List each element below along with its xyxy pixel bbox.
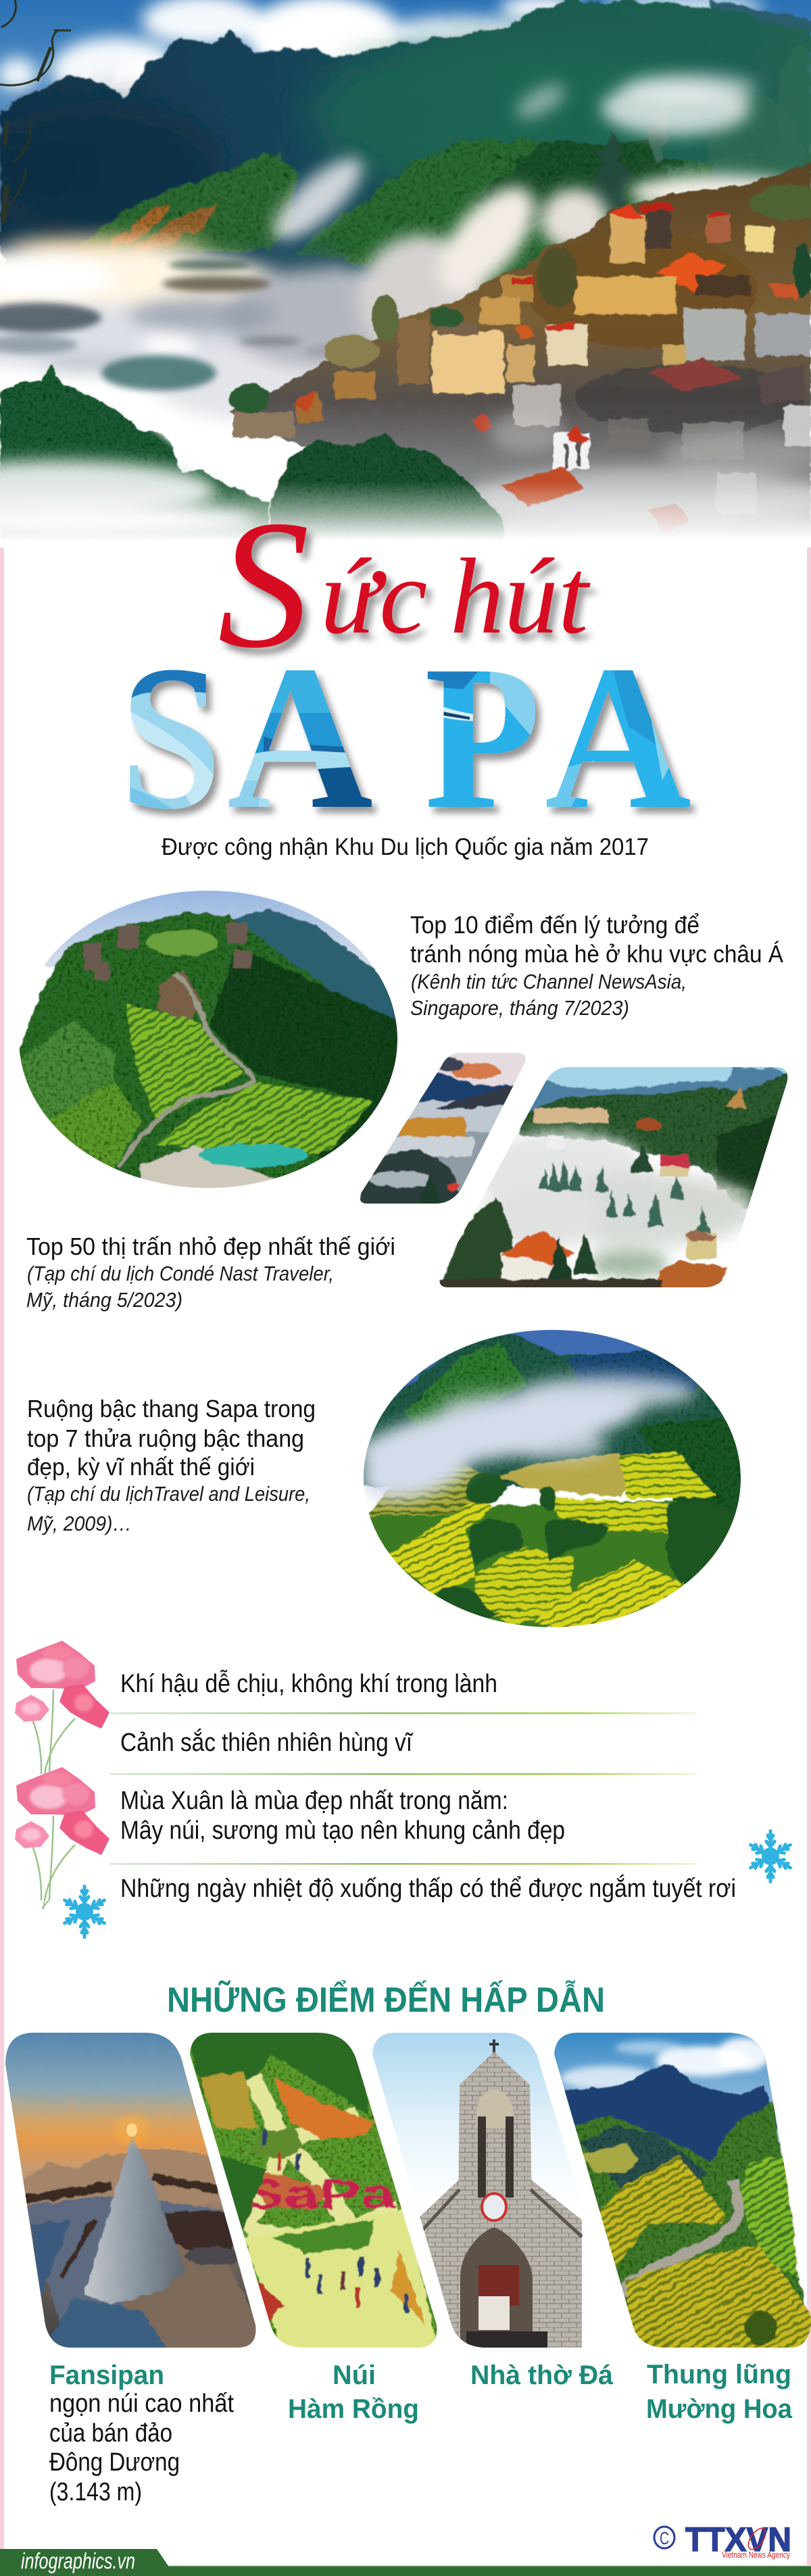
wooden deck [24, 2196, 230, 2325]
headline line 1: Top 10 điểm đến lý tưởng để [410, 911, 699, 939]
hanging branches [0, 0, 71, 223]
crowd at door [466, 2331, 547, 2352]
railing near [61, 2220, 95, 2277]
description line 4: (3.143 m) [49, 2478, 142, 2506]
title: Sức hút: ức [320, 536, 427, 656]
turquoise pool [199, 1144, 308, 1167]
hilltop grass [147, 929, 218, 956]
yellow villa [686, 1233, 716, 1259]
village strip [534, 1108, 608, 1123]
title: Sức hút [218, 482, 591, 686]
town ground [228, 162, 811, 547]
photo card: Muong Hoa valley [547, 2027, 811, 2352]
clouds [561, 2037, 770, 2090]
mist band [351, 1376, 696, 1514]
word Sa Pa in flowers: SaPa [243, 2171, 396, 2218]
painted hillside [7, 878, 412, 1196]
shaded left flank [0, 101, 230, 237]
sunset sky [0, 2027, 267, 2352]
point 2: Cảnh sắc thiên nhiên hùng vĩ [120, 1728, 413, 1757]
list: climate and scenery points [120, 1669, 736, 1903]
pine near mansion [573, 1233, 598, 1274]
green base of lower field [358, 1500, 689, 1635]
cross on spire [489, 2039, 499, 2054]
distant blue mountain [230, 909, 406, 1061]
line 2: Mường Hoa [646, 2394, 793, 2424]
painted valley [558, 2064, 811, 2352]
yellow path network [243, 2078, 399, 2237]
tall pine [547, 1237, 574, 1284]
lower green bed [272, 2220, 375, 2254]
town on ridge [434, 1085, 514, 1108]
point 3 line 2: Mây núi, sương mù tạo nên khung cảnh đẹp [120, 1816, 565, 1845]
louvre window left [478, 2116, 486, 2198]
blue mountains [527, 1067, 791, 1122]
caption: Muong Hoa valley [646, 2360, 793, 2424]
distant ridge at top right [708, 0, 811, 32]
dusk fog [392, 1101, 507, 1132]
red lights [448, 1183, 460, 1191]
logo: TTXVN copyright mark [654, 2521, 791, 2560]
tree upper right [589, 131, 633, 216]
copyright circle [654, 2527, 674, 2548]
hillside villages [727, 1088, 747, 1108]
main mountain range [0, 0, 811, 284]
caption: Ham Rong mountain [288, 2360, 419, 2424]
sky [433, 1061, 797, 1101]
description line 1: ngọn núi cao nhất [49, 2389, 234, 2418]
left deck blue [30, 2220, 71, 2298]
red door [478, 2265, 519, 2306]
low mist at left bottom [0, 460, 216, 520]
orange clouds [451, 1063, 502, 1079]
pool deck [140, 1145, 297, 1193]
spire arch [476, 2089, 514, 2129]
clouds above the ridge [0, 0, 772, 101]
text: Top 10 cooling destinations [410, 911, 783, 1020]
photo: Sa Pa at dusk, parallelogram [355, 1047, 531, 1210]
red-roofed hotel [660, 1156, 689, 1167]
lower golden terraces [625, 2244, 811, 2352]
agency line: Vietnam News Agency [722, 2550, 790, 2560]
text: Top 50 towns [26, 1233, 395, 1312]
source line 1: (Tạp chí du lịchTravel and Leisure, [27, 1482, 310, 1506]
green bar and tab [0, 2549, 811, 2576]
description line 3: Đông Dương [49, 2448, 180, 2477]
fog over the lower town [466, 412, 811, 525]
second letter A: A [545, 623, 691, 852]
small fir [651, 108, 667, 162]
letter S: S [120, 623, 222, 852]
icon: snowflake, right [749, 1831, 792, 1881]
upper left olive terrace [368, 1463, 493, 1516]
thin highlight above bar [168, 2565, 811, 2567]
dark boulders [185, 2246, 241, 2265]
left flower bed [200, 2071, 258, 2129]
roofs and facades [610, 215, 645, 262]
road [119, 973, 253, 1168]
warm shadow mass [527, 233, 757, 348]
title: SAPA marbled letters [120, 623, 691, 852]
wooded hills [520, 1071, 791, 1210]
blue mountains [406, 1072, 520, 1108]
point 4: Những ngày nhiệt độ xuống thấp có thể được ngắm tuyết rơi [120, 1874, 736, 1903]
stone church and orange roof [501, 426, 757, 534]
autumn tree [635, 1118, 662, 1132]
painted garden [182, 2027, 446, 2352]
rocks [122, 2237, 264, 2352]
orange flower bed [274, 2078, 375, 2139]
source line 2: Mỹ, tháng 5/2023) [26, 1288, 182, 1312]
dark deck shadow [166, 2210, 233, 2250]
lower fog [378, 1137, 473, 1157]
dark hedge [220, 2156, 267, 2230]
foreground pine forests [0, 365, 503, 541]
flower spray 2 [15, 1767, 109, 1900]
church nave [416, 2179, 582, 2352]
lower left terrace [389, 1497, 493, 1595]
cream villa [547, 1135, 564, 1149]
mansion roof [501, 1231, 574, 1265]
forest top [186, 2027, 368, 2115]
headline line 3: đẹp, kỳ vĩ nhất thế giới [27, 1453, 255, 1481]
summit pyramid [84, 2135, 186, 2304]
dark tree at bottom [744, 2310, 777, 2346]
source line 1: (Tạp chí du lịch Condé Nast Traveler, [27, 1262, 334, 1285]
photo: Sa Pa in morning fog, parallelogram [433, 1061, 797, 1291]
fade into the white page [0, 481, 811, 547]
photo card: Ham Rong flower garden [182, 2027, 446, 2352]
hotel walls [660, 1167, 689, 1176]
dark ridges within the clouds [0, 259, 385, 391]
lit green terrace [124, 1004, 243, 1120]
lit hotel [399, 1118, 466, 1138]
photo card: Fansipan summit at sunset [0, 2027, 267, 2352]
town on the hillside [228, 162, 811, 547]
photo card: Stone Church [365, 2027, 629, 2352]
title: Sức hút: S [218, 482, 310, 686]
source line 2: Singapore, tháng 7/2023) [410, 996, 629, 1020]
headline line 2: top 7 thửa ruộng bậc thang [27, 1425, 304, 1452]
hilltop villas [84, 922, 252, 1020]
line 2: Hàm Rồng [288, 2394, 419, 2424]
diagonal cloud in the valley [262, 146, 374, 253]
red flower band [247, 2169, 331, 2210]
line 1: Thung lũng [647, 2360, 791, 2389]
copyright circle: C [660, 2528, 669, 2548]
headline line 2: tránh nóng mùa hè ở khu vực châu Á [410, 940, 783, 968]
letter A: A [227, 623, 373, 852]
headline line 1: Ruộng bậc thang Sapa trong [27, 1395, 316, 1422]
sun glow [114, 2115, 149, 2145]
icon: snowflake, lower left [63, 1887, 106, 1937]
lower right terrace [534, 1561, 686, 1635]
name: Fansipan [49, 2360, 164, 2390]
heading: attractive destinations: NHỮNG ĐIỂM ĐẾN HẤP DẪN [167, 1980, 605, 2020]
extended stems [42, 1900, 49, 1909]
painted foggy town [433, 1061, 797, 1291]
river [622, 2179, 739, 2294]
bright mist bottom [0, 504, 257, 537]
villa roof [686, 1230, 718, 1242]
flower spray 1 [15, 1641, 109, 1774]
painted dusk scene [355, 1047, 531, 1210]
orange roofed mansion [501, 1254, 552, 1284]
red border bottom left [253, 2277, 284, 2325]
forested mountain [358, 1333, 743, 1608]
green light on the right flank [311, 41, 716, 189]
louvre window right [506, 2116, 514, 2198]
headline: Top 50 thị trấn nhỏ đẹp nhất thế giới [26, 1233, 395, 1260]
right flower bed [391, 2250, 426, 2325]
lower walkway [243, 2210, 439, 2352]
painted summit [0, 2027, 267, 2352]
sea of clouds [0, 171, 804, 419]
list: pink flowers decoration [15, 1641, 109, 1909]
green valley slopes [564, 2102, 811, 2352]
dusk sky [355, 1047, 531, 1088]
dark left trees [439, 1196, 514, 1287]
fir cluster right [707, 95, 805, 181]
blue mountains [558, 2064, 777, 2203]
pale fog patch [369, 1171, 431, 1187]
orange bush [659, 1261, 727, 1291]
right green terraces [740, 2156, 799, 2277]
caption: Fansipan [49, 2360, 234, 2506]
dense fog [473, 1132, 757, 1277]
title: Sức hút: hút [450, 536, 591, 656]
dark ground [439, 1279, 662, 1290]
point 1: Khí hậu dễ chịu, không khí trong lành [120, 1669, 497, 1698]
upper right mist [511, 73, 757, 135]
red orbit accent [745, 2525, 769, 2552]
painted terraces [358, 1324, 743, 1635]
terraced hill [595, 2156, 727, 2277]
hero photo: Sa Pa town above the clouds [0, 0, 811, 547]
photo: golden rice terraces under mist, circle [351, 1324, 743, 1635]
sky [0, 0, 811, 243]
pine [418, 1172, 443, 1206]
sky [547, 2027, 811, 2162]
mid right terrace [541, 1497, 683, 1533]
sky gradient [365, 2027, 629, 2352]
dark green tree clumps [433, 1472, 737, 1622]
lower curved terrace [155, 1083, 372, 1159]
gothic door arch [460, 2227, 533, 2352]
far railing [24, 2177, 218, 2200]
base haze [355, 1047, 531, 1210]
green bed [250, 2129, 304, 2159]
source line 1: (Kênh tin tức Channel NewsAsia, [411, 970, 687, 993]
point 3 line 1: Mùa Xuân là mùa đẹp nhất trong năm: [120, 1787, 508, 1815]
right pink page edge [807, 527, 811, 2576]
round emblem [482, 2194, 506, 2221]
notice board [478, 2296, 510, 2330]
visitors [264, 2129, 409, 2314]
blue-grey foreground rock [41, 2298, 169, 2352]
dark trees [355, 1149, 466, 1210]
upper right terrace [618, 1452, 716, 1499]
TTXVN wordmark: TTXVN [685, 2521, 791, 2558]
dark clouds [435, 1058, 464, 1071]
far mountains [14, 2149, 230, 2203]
upper middle field [497, 1453, 632, 1497]
text: rice terraces ranking [27, 1395, 316, 1535]
description line 2: của bán đảo [49, 2419, 172, 2448]
footer bar with site tab [0, 2548, 811, 2576]
line 1: Núi [333, 2360, 376, 2390]
sun [126, 2123, 137, 2137]
misty pines [539, 1145, 711, 1233]
gable edge [416, 2189, 582, 2237]
sunlit slopes [74, 139, 811, 291]
letter P: P [424, 623, 541, 852]
sky [358, 1324, 743, 1406]
site name: infographics.vn [21, 2548, 135, 2573]
garden base [182, 2027, 446, 2352]
lower middle terrace [473, 1547, 574, 1625]
sky [7, 878, 412, 966]
photo: aerial resort on green hill, circle [7, 878, 412, 1196]
fir cluster edge [783, 53, 811, 174]
caption: Stone Church: Nhà thờ Đá [470, 2360, 614, 2390]
source line 2: Mỹ, 2009)… [27, 1512, 132, 1535]
tower [458, 2052, 532, 2210]
white cloud stream between trees [128, 395, 277, 503]
subtitle: Được công nhận Khu Du lịch Quốc gia năm 2017 [162, 834, 649, 860]
mid valley light field [581, 2142, 639, 2173]
green hill body [7, 912, 412, 1196]
left pink page edge [0, 527, 4, 2576]
painted landscape [0, 0, 811, 291]
